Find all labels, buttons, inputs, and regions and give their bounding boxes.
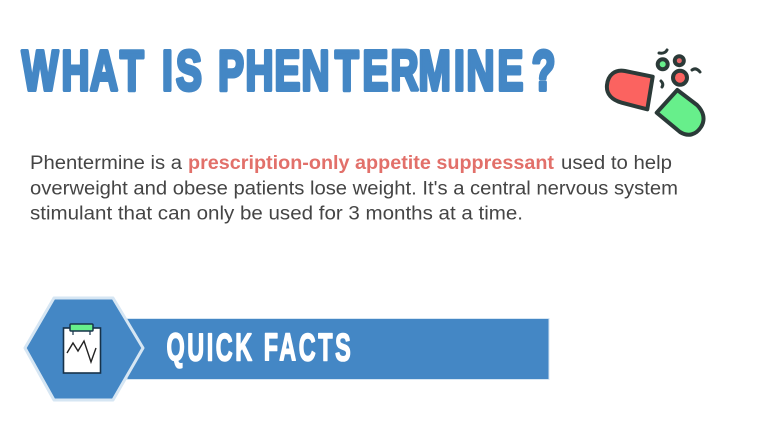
intro paragraph: overweight and obese patients lose weight. It's a central nervous system <box>30 178 678 200</box>
intro paragraph: stimulant that can only be used for 3 months at a time. <box>30 204 523 224</box>
intro paragraph: used to help <box>561 153 672 174</box>
icon: broken pill capsule <box>607 50 704 135</box>
intro paragraph <box>30 153 678 224</box>
banner bar <box>127 318 549 380</box>
intro paragraph: prescription-only appetite suppressant <box>188 153 555 174</box>
quick facts banner <box>25 298 549 400</box>
banner heading: QUICK FACTS <box>167 325 351 369</box>
title: WHAT IS PHENTERMINE? <box>22 40 555 103</box>
hexagon badge <box>25 298 143 400</box>
icon: clipboard with chart <box>64 324 100 373</box>
intro paragraph: Phentermine is a <box>30 153 182 174</box>
